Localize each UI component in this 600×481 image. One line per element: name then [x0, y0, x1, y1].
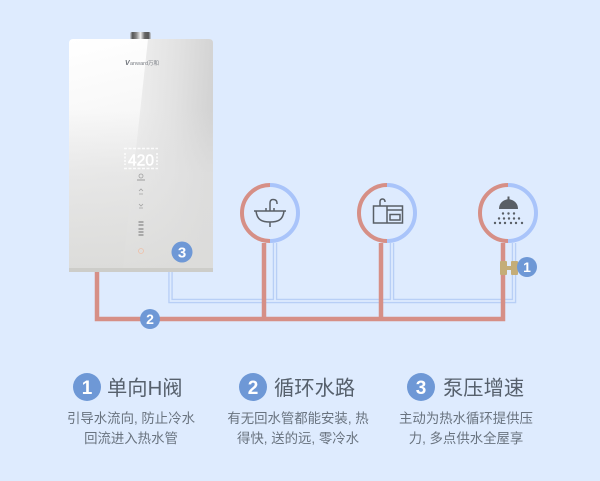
description: 引导水流向, 防止冷水: [67, 411, 196, 426]
hot water pipes: [97, 243, 503, 319]
description: 得快, 送的远, 零冷水: [237, 430, 360, 446]
cold water pipes: [170, 243, 514, 301]
heater nozzle: [130, 32, 151, 40]
brand logo: anward万和: [130, 59, 159, 67]
fixture: kitchen: [359, 185, 415, 241]
badge 3 on heater: [172, 242, 192, 262]
number 2: 2: [248, 378, 258, 399]
display: 420: [128, 152, 154, 170]
heater sheen: [123, 39, 213, 268]
display: [124, 148, 158, 170]
description: 回流进入热水管: [84, 431, 178, 446]
description: 主动为热水循环提供压: [399, 411, 533, 426]
feature 1: [67, 373, 196, 446]
panel controls: [137, 174, 145, 254]
icon: sink: [254, 200, 286, 227]
brand logo: [125, 59, 159, 67]
H valve: [500, 261, 518, 275]
badge 1 on valve: 1: [523, 259, 531, 275]
icon: shower head: [494, 196, 523, 224]
heading: 泵压增速: [443, 377, 524, 400]
water heater: [69, 32, 213, 272]
feature 3: [399, 373, 533, 446]
badge 1 on valve: [517, 257, 537, 277]
feature 2: [227, 373, 369, 446]
badge 2 on pipe: 2: [146, 311, 154, 327]
heater body: [69, 39, 213, 272]
fixture: sink: [242, 185, 298, 241]
icon: kitchen cabinet: [374, 199, 402, 223]
description: 有无回水管都能安装, 热: [227, 411, 369, 426]
heater bottom edge: [69, 268, 213, 272]
brand logo: V: [125, 60, 131, 67]
badge 2 on pipe: [140, 309, 160, 329]
description: 力, 多点供水全屋享: [409, 430, 523, 446]
fixture: shower: [480, 185, 536, 241]
number 3: 3: [416, 378, 426, 399]
number 1: 1: [82, 378, 93, 399]
heater lower fade: [69, 110, 213, 268]
badge 3 on heater: 3: [178, 244, 186, 262]
number 2: [239, 373, 267, 401]
heading: 单向H阀: [107, 377, 182, 400]
heading: 循环水路: [274, 377, 355, 400]
